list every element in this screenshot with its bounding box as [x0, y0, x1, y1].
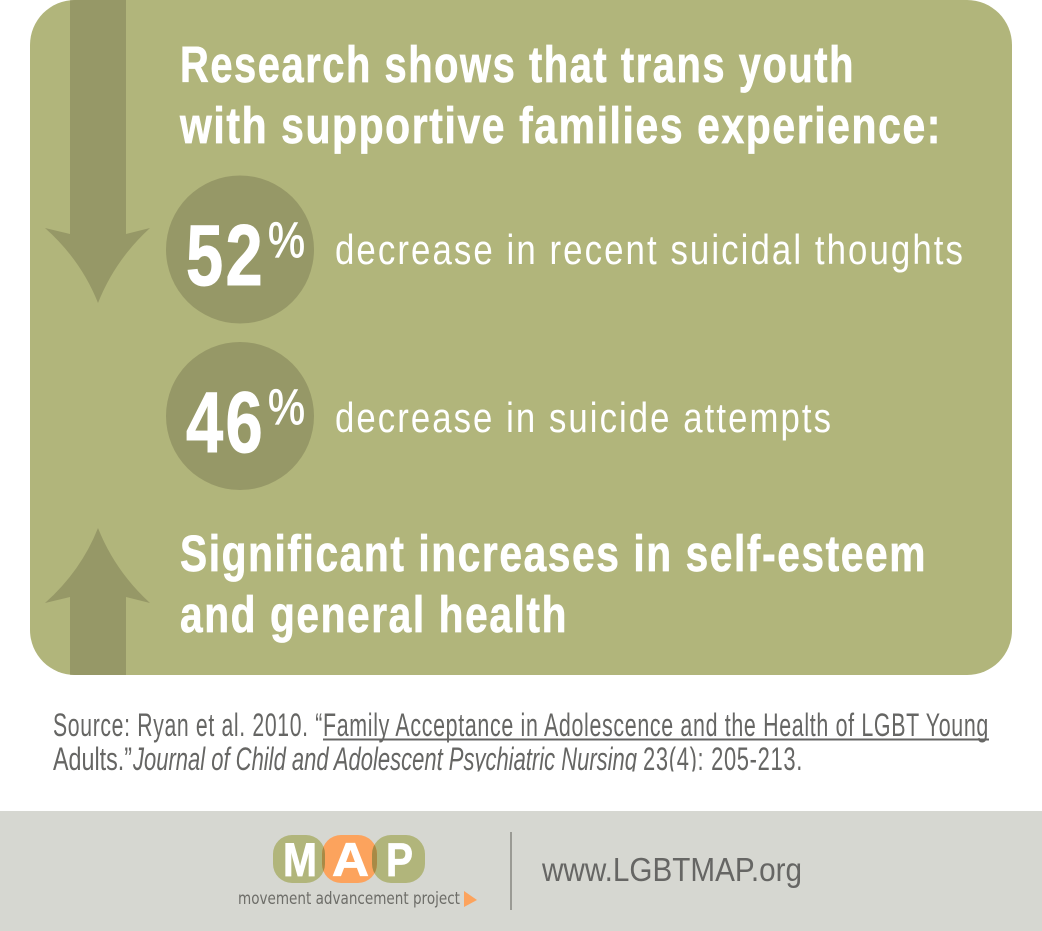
stat: 46 percent: [166, 342, 314, 490]
footer band: [0, 811, 1042, 931]
panel: research findings: [30, 0, 1012, 675]
logo: MAP: [238, 833, 477, 909]
source citation: Journal of Child and Adolescent Psychiatric Nursing: [132, 741, 637, 777]
logo: MAP: A: [332, 833, 369, 886]
stat: 52 percent: %: [268, 212, 305, 268]
heading: Research shows that trans youth: [180, 36, 855, 93]
source citation: [53, 712, 989, 772]
stat: 52 percent: [166, 176, 314, 324]
source citation: Source: Ryan et al. 2010. “: [53, 707, 323, 743]
stat: 52 percent: 52: [186, 208, 265, 304]
website url: www.LGBTMAP.org: [541, 851, 802, 888]
icon: up arrow: [45, 528, 150, 675]
stat: 46 percent: %: [268, 379, 305, 435]
logo: MAP: M: [283, 833, 317, 886]
logo: MAP: movement advancement project: [238, 889, 460, 909]
text: suicide attempts: decrease in suicide attempts: [335, 394, 833, 441]
source citation: Adults.”: [53, 741, 132, 777]
heading: [179, 36, 942, 154]
stat: 46 percent: 46: [186, 375, 265, 471]
logo: MAP: P: [386, 833, 413, 886]
text: self-esteem and health: and general health: [180, 586, 568, 643]
text: self-esteem and health: [180, 525, 927, 643]
icon: down arrow: [45, 0, 150, 303]
source citation: 23(4): 205-213.: [643, 741, 803, 777]
